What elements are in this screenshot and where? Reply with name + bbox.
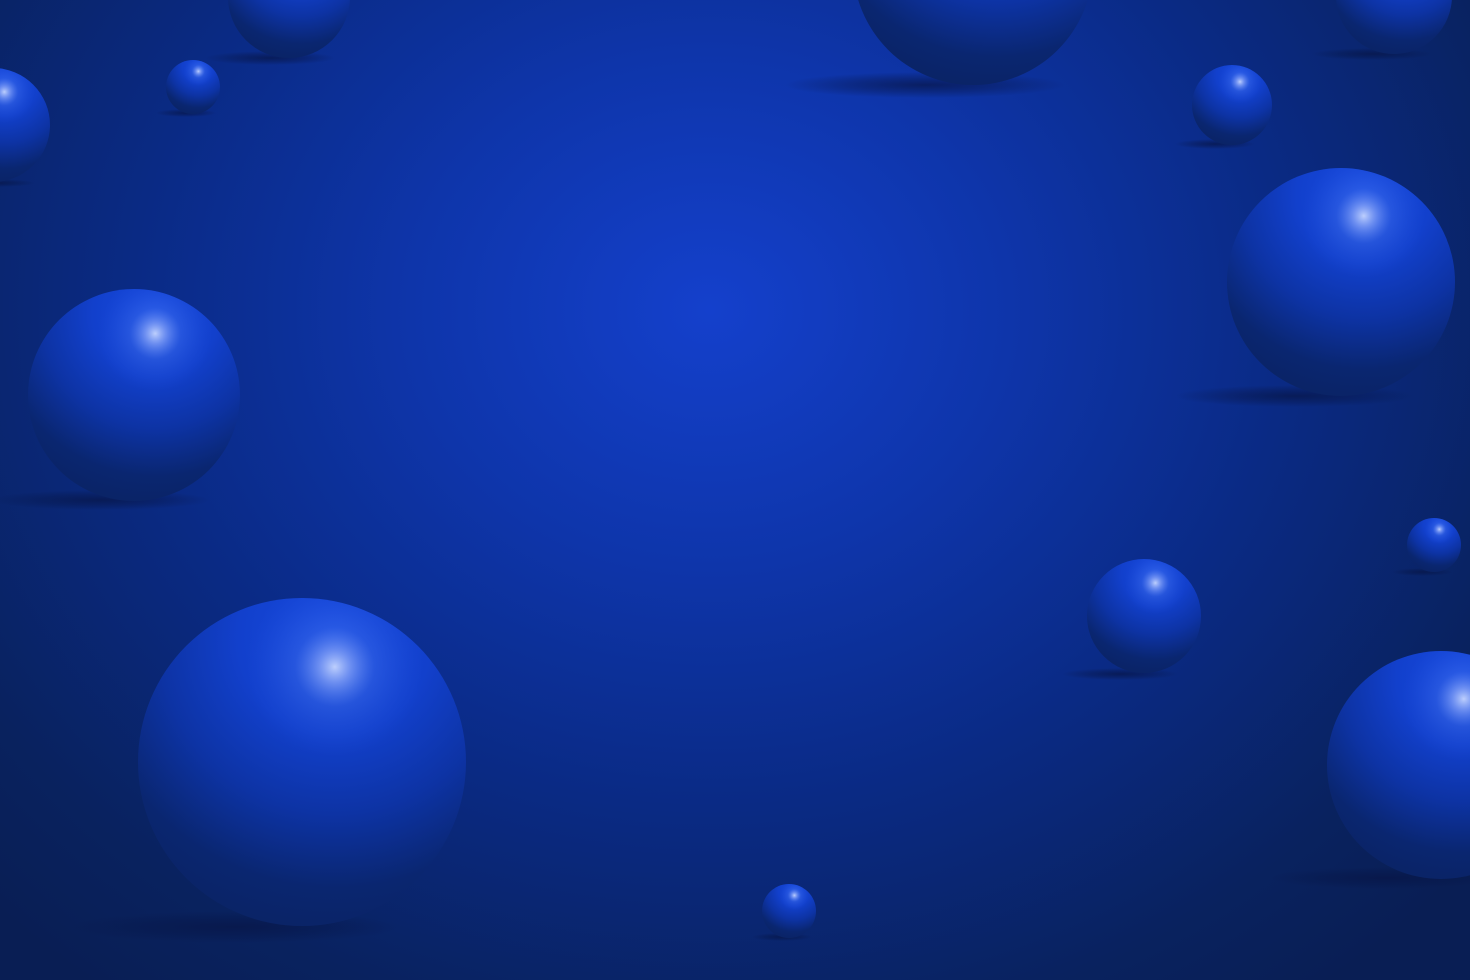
sphere: medium right center xyxy=(1062,559,1201,680)
sphere: left edge xyxy=(0,68,50,187)
sphere: small upper right xyxy=(1175,65,1272,149)
sphere: top right partial xyxy=(1312,0,1452,60)
sphere: top center partial xyxy=(785,0,1093,98)
sphere: large right xyxy=(1175,168,1455,407)
sphere: large bottom right xyxy=(1270,651,1470,889)
sphere: tiny bottom center xyxy=(752,884,816,941)
sphere: small top left xyxy=(156,60,220,117)
sphere: tiny right xyxy=(1392,518,1461,576)
sphere: large left xyxy=(0,289,240,510)
sphere: top left partial xyxy=(205,0,350,65)
sphere: biggest bottom left xyxy=(70,598,466,943)
